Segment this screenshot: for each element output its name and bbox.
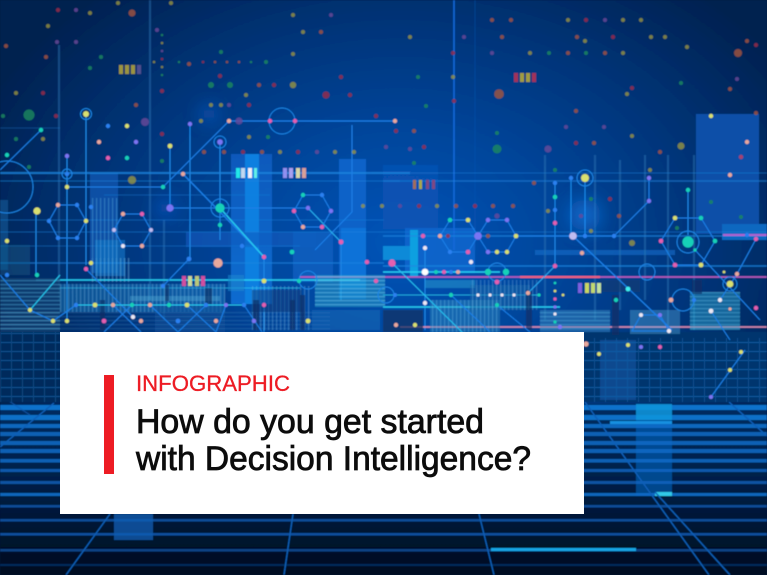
ring markers — [0, 108, 737, 311]
dim dots: red — [41, 8, 758, 238]
headline — [135, 403, 531, 478]
headline: How do you get started — [136, 403, 484, 441]
headline: with Decision Intelligence? — [135, 440, 531, 478]
perspective floor — [0, 395, 767, 575]
bright dots: teal — [5, 128, 717, 324]
bright dots: blue and violet — [5, 122, 749, 399]
bright dots: yellow — [5, 111, 743, 372]
dim dots: orange — [4, 10, 758, 238]
dim dots: green — [1, 34, 743, 230]
city blocks — [0, 114, 767, 304]
dim dots: purple — [55, 8, 739, 218]
center glow — [156, 107, 601, 231]
dim dots: olive — [14, 1, 689, 246]
circuit horizontal lines — [0, 128, 767, 401]
eyebrow label: INFOGRAPHIC — [136, 371, 290, 396]
bright dots: pink — [84, 119, 758, 349]
data mosaic band — [0, 198, 767, 402]
title card — [60, 332, 584, 514]
bright dots: pale and salmon — [56, 119, 749, 347]
bar glyphs — [119, 65, 601, 293]
circuit connectors — [0, 121, 760, 397]
red accent bar — [104, 375, 114, 474]
